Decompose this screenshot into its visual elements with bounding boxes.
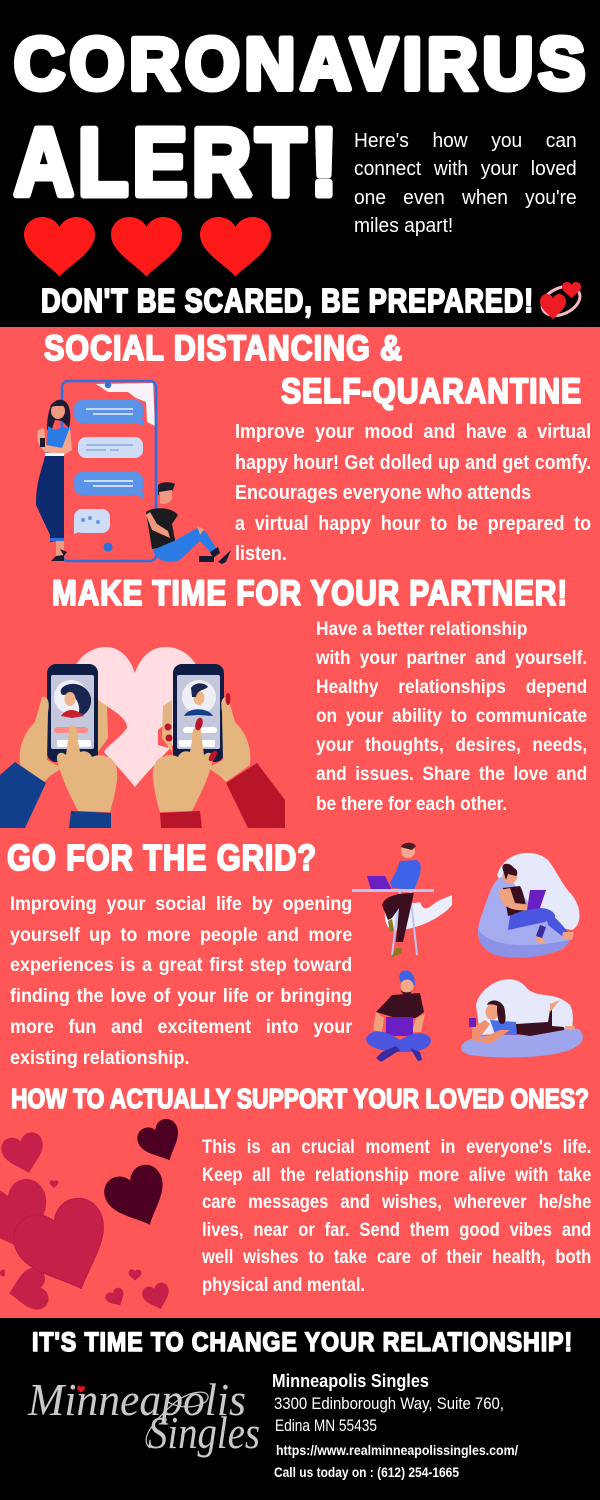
- text: contact details: Edina MN 55435: [275, 1416, 377, 1435]
- panel: go for the grid: [7, 837, 583, 1069]
- panel: header: [0, 0, 600, 327]
- text: intro: [354, 130, 577, 237]
- text: crucial moment: care messages and wishes, wherever he/she: [202, 1191, 591, 1213]
- text: better relationship: on your ability to communicate: [316, 706, 587, 727]
- illustration: phone chat with two people: [36, 381, 231, 564]
- illustration: woman lying on cushion: [461, 979, 583, 1057]
- text: happy hour: listen.: [235, 543, 287, 565]
- text: crucial moment: physical and mental.: [202, 1274, 365, 1296]
- text: social life: more fun and excitement into your: [10, 1016, 352, 1038]
- illustration: woman on beanbag: [478, 853, 580, 958]
- illustration: man at desk: [352, 843, 452, 958]
- text: crucial moment: lives, near or far. Send them good vibes and: [202, 1218, 591, 1240]
- icon: two hearts with ring: [537, 281, 585, 321]
- text: intro: one even when you're: [354, 187, 577, 209]
- panel: support your loved ones: [0, 1083, 591, 1310]
- illustration: scattered hearts: [0, 1115, 189, 1314]
- text: happy hour: [235, 421, 591, 565]
- text: intro: connect with your loved: [354, 158, 577, 180]
- text: contact details: https://www.realminneapolissingles.com/: [276, 1442, 518, 1458]
- text: crucial moment: well wishes to take care of their health, both: [202, 1246, 591, 1268]
- logo: minneapolis singles: Singles: [148, 1407, 260, 1458]
- text: better relationship: with your partner and yourself.: [316, 648, 587, 669]
- panel: make time for your partner: [0, 574, 587, 828]
- text: social life: experiences is a great first step toward: [10, 954, 352, 976]
- illustration: two hands holding phones over a heart: [0, 647, 285, 828]
- text: contact details: [272, 1371, 518, 1480]
- text: intro: miles apart!: [354, 215, 453, 237]
- panel: footer: [0, 1318, 600, 1500]
- icon: three red hearts: [24, 217, 271, 276]
- text: better relationship: be there for each other.: [316, 794, 507, 815]
- text: happy hour: happy hour! Get dolled up and get comfy.: [235, 452, 591, 474]
- text: contact details: Call us today on : (612) 254-1665: [274, 1464, 459, 1480]
- heading: go for the grid: GO FOR THE GRID?: [7, 837, 317, 878]
- heading: social distancing: SOCIAL DISTANCING &: [44, 329, 403, 368]
- text: social life: finding the love of your life or bringing: [10, 985, 352, 1007]
- logo: minneapolis singles: [27, 1374, 260, 1458]
- text: crucial moment: This is an crucial moment in everyone's life.: [202, 1136, 591, 1158]
- title: coronavirus: CORONAVIRUS: [14, 24, 590, 105]
- title: alert: ALERT!: [14, 109, 342, 216]
- text: happy hour: a virtual happy hour to be prepared to: [235, 512, 591, 534]
- text: crucial moment: [202, 1136, 591, 1296]
- text: contact details: 3300 Edinborough Way, Suite 760,: [274, 1394, 504, 1413]
- text: social life: Improving your social life by opening: [10, 893, 352, 915]
- text: contact details: Minneapolis Singles: [272, 1371, 429, 1391]
- text: better relationship: [316, 619, 587, 815]
- text: social life: yourself up to more people and more: [10, 924, 352, 946]
- text: better relationship: Healthy relationships depend: [316, 677, 587, 698]
- text: happy hour: Improve your mood and have a virtual: [235, 421, 591, 443]
- text: intro: Here's how you can: [354, 130, 577, 152]
- logo: minneapolis singles: Minneapolis: [27, 1374, 246, 1425]
- panel: social distancing: [36, 329, 591, 565]
- text: better relationship: your thoughts, desires, needs,: [316, 735, 587, 756]
- text: happy hour: Encourages everyone who attends: [235, 482, 531, 504]
- text: social life: existing relationship.: [10, 1047, 189, 1069]
- text: better relationship: and issues. Share the love and: [316, 764, 587, 785]
- text: crucial moment: Keep all the relationship more alive with take: [202, 1164, 591, 1186]
- text: social life: [10, 893, 352, 1069]
- illustration: man with laptop sitting cross-legged: [366, 970, 431, 1062]
- text: better relationship: Have a better relationship: [316, 619, 527, 640]
